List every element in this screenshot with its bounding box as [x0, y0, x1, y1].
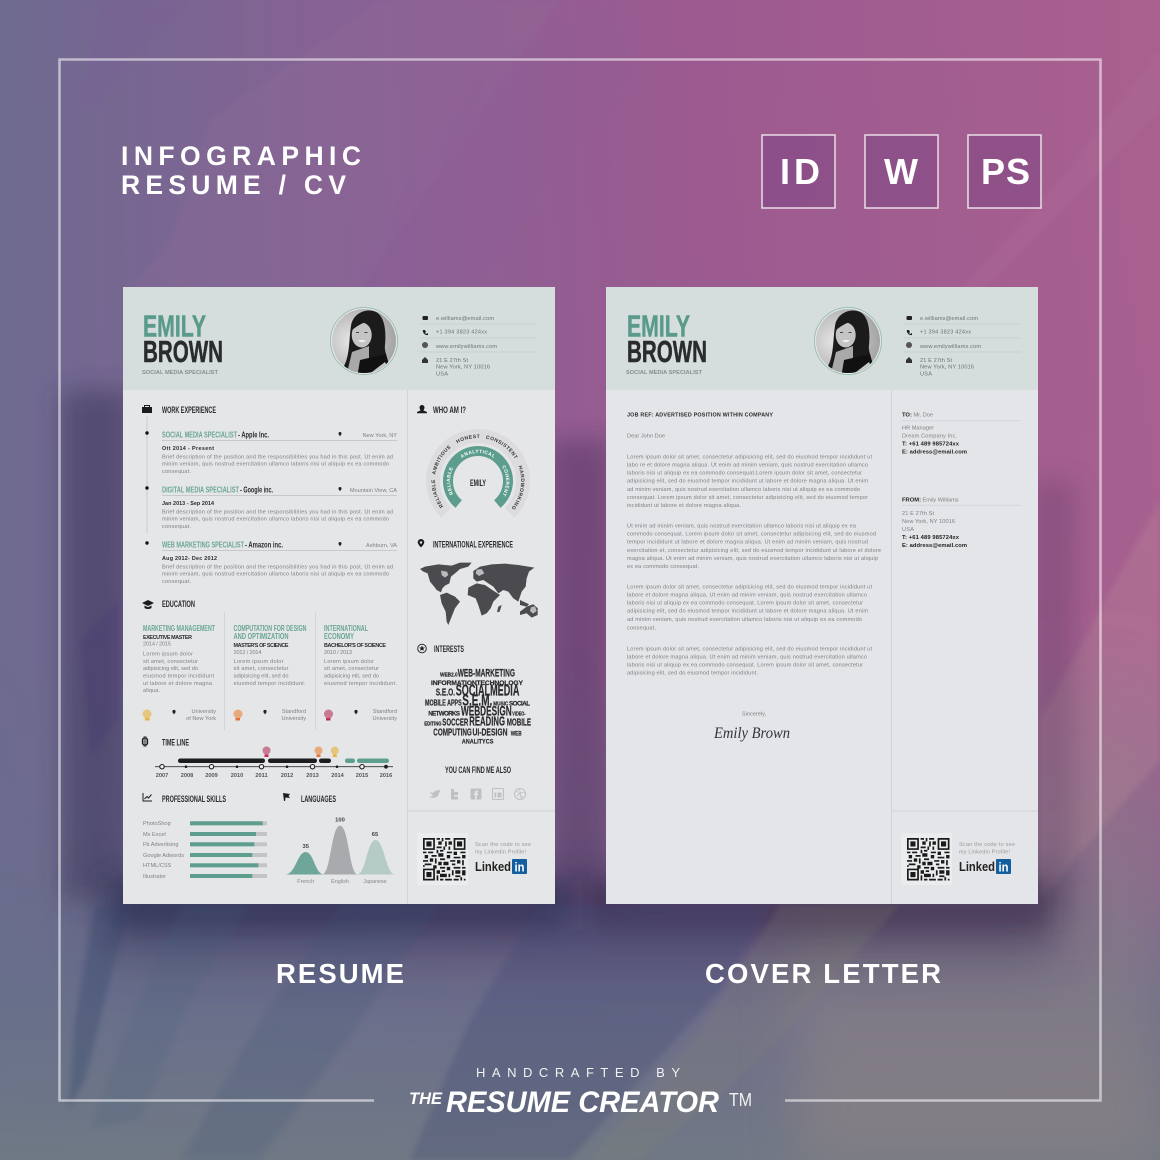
- paragraph 3: [627, 585, 872, 631]
- linkedin logo: Linked: [959, 859, 995, 874]
- chart: language peaks: Japanese: [363, 879, 387, 885]
- paragraph 2: tempor incididunt ut labore et dolore magna aliqua. Ut enim ad minim veniam, quis nostrud: [627, 540, 868, 546]
- chart: personality arcs: EMILY: [470, 478, 486, 488]
- paragraph 3: Lorem ipsum dolor sit amet, consectetur adipisicing elit, sed do eiusmod tempor incididunt ut: [627, 585, 872, 591]
- education column 3: ECONOMY: [324, 631, 354, 641]
- education column 1: adipisicing elit, sed do: [143, 666, 198, 672]
- badge: PS: PS: [981, 151, 1030, 192]
- recipient block: [902, 413, 1021, 456]
- icon: person: [417, 405, 427, 413]
- section: professional skills: PROFESSIONAL SKILLS: [162, 794, 226, 804]
- education column 3: adipisicing elit, sed do: [324, 674, 379, 680]
- education column 3: [324, 623, 397, 722]
- paragraph 4: adipisicing elit, sed do eiusmod tempor incididunt.: [627, 670, 758, 676]
- chart: word cloud: INFORMATIONTECHNOLOGY: [431, 680, 523, 687]
- chart: personality arcs: CONSISTENT: [486, 436, 518, 458]
- education column 2: adipisicing elit, sed do: [234, 674, 288, 680]
- qr code and linkedin: my Linkedin Profile!: [475, 850, 526, 856]
- section: who am i: [417, 405, 530, 518]
- qr code and linkedin: Scan the code to see: [959, 842, 1015, 848]
- education column 2: 2012 / 2014: [234, 650, 262, 656]
- section: professional skills: Fb Advertising: [143, 842, 178, 848]
- recipient block: HR Manager: [902, 426, 934, 432]
- education column 3: 2010 / 2013: [324, 650, 352, 656]
- paragraph 4: labore et dolore magna aliqua. Ut enim ad minim veniam, quis nostrud exercitation ullamco: [627, 654, 867, 660]
- job 2: Brief description of the position and the responsibilities you had in this post. Ut enim ad: [162, 510, 393, 516]
- chart: language peaks: 65: [372, 832, 379, 838]
- sender block: E: address@email.com: [902, 543, 967, 549]
- paragraph 4: laboris nisi ut aliquip ex ea commodo consequat. Lorem ipsum dolor sit amet, consectetur: [627, 662, 863, 668]
- job 3: Aug 2012- Dec 2012: [162, 556, 217, 562]
- cover name: SOCIAL MEDIA SPECIALIST: [626, 370, 703, 376]
- job 1: [162, 430, 397, 475]
- label: resume: RESUME: [276, 958, 404, 989]
- chart: word cloud: S.E.O.: [436, 687, 455, 698]
- chart: world map: [420, 563, 538, 625]
- chart: personality arcs: ANALYTICAL: [461, 450, 494, 458]
- title: RESUME / CV: [121, 170, 346, 200]
- section: time line: 2007: [156, 773, 168, 779]
- job 3: [162, 540, 397, 585]
- chart: personality arcs: [426, 429, 530, 518]
- education column 2: University: [281, 716, 306, 722]
- qr code: [907, 838, 950, 880]
- section: time line: 2015: [356, 773, 368, 779]
- badge: W: [865, 135, 938, 208]
- chart: word cloud: MUSIC: [493, 702, 509, 708]
- cover name: BROWN: [627, 334, 707, 369]
- letter body: JOB REF: ADVERTISED POSITION WITHIN COMPANY: [627, 413, 773, 419]
- section: interests: [418, 644, 531, 745]
- education column 2: COMPUTATION FOR DESIGN: [234, 623, 306, 633]
- paragraph 3: ad minim veniam, quis nostrud exercitation ullamco laboris nisi ut aliquip ex ea commodo: [627, 617, 862, 623]
- paragraph 1: [627, 455, 872, 509]
- sender block: New York, NY 10016: [902, 519, 955, 525]
- chart: personality arcs: RELIABLE: [432, 480, 444, 508]
- chart: word cloud: ANALITYCS: [462, 738, 494, 745]
- section: time line: 2008: [181, 773, 193, 779]
- paragraph 4: Lorem ipsum dolor sit amet, consectetur adipisicing elit, sed do eiusmod tempor incididunt ut: [627, 646, 872, 652]
- contact list: www.emilywilliams.com: [435, 344, 497, 350]
- job 3: minim veniam, quis nostrud exercitation ullamco laboris nisi ut aliquip ex ea commodo: [162, 572, 389, 578]
- section: time line: 2011: [255, 773, 268, 779]
- section: work experience: WORK EXPERIENCE: [162, 405, 216, 415]
- credit: handcrafted by: THE: [409, 1090, 443, 1108]
- contact list: USA: [920, 372, 932, 378]
- contact list: [904, 316, 1021, 378]
- job 1: Ott 2014 - Present: [162, 446, 214, 452]
- section: education: [142, 599, 397, 730]
- chart: personality arcs: RELIABLE: [446, 467, 454, 496]
- social links: YOU CAN FIND ME ALSO: [445, 765, 511, 775]
- section: time line: 2013: [306, 773, 319, 779]
- education column 3: Lorem ipsum dolor: [324, 659, 374, 665]
- qr code and linkedin: my Linkedin Profile!: [959, 850, 1010, 856]
- chart: word cloud: VIDEO-: [512, 711, 526, 717]
- sender block: USA: [902, 527, 914, 533]
- paragraph 2: ex ea commodo consequat.: [627, 564, 699, 570]
- education column 1: Lorem ipsum dolor: [143, 652, 193, 658]
- chart: personality arcs: HARDWORKING: [512, 466, 524, 510]
- linkedin logo: in: [998, 860, 1009, 874]
- education column 3: BACHELOR'S OF SCIENCE: [324, 643, 386, 649]
- section: time line: [142, 736, 393, 779]
- paragraph 3: labore et dolore magna aliqua. Ut enim ad minim veniam, quis nostrud exercitation ullamco: [627, 593, 867, 599]
- education column 2: sit amet, consectetur: [234, 666, 289, 672]
- cover name: EMILY: [627, 308, 690, 344]
- chart: personality arcs: HONEST: [456, 434, 480, 444]
- contact list: e.williams@email.com: [920, 316, 978, 322]
- chart: word cloud: WEB2.0: [440, 673, 458, 679]
- job 2: Mountain View, CA: [350, 488, 397, 494]
- sender block: FROM: Emily Williams: [902, 497, 959, 503]
- qr code and linkedin: [901, 833, 1015, 885]
- section: time line: 2010: [231, 773, 243, 779]
- icon: line chart: [143, 793, 152, 801]
- chart: language peaks: 100: [335, 818, 345, 824]
- job 3: WEB MARKETING SPECIALIST: [162, 540, 245, 550]
- chart: word cloud: SOCIALMEDIA: [456, 682, 519, 699]
- recipient block: T: +61 489 985724xx: [902, 442, 960, 448]
- section: time line: TIME LINE: [162, 738, 189, 748]
- education column 3: University: [372, 716, 397, 722]
- education column 3: Standford: [373, 709, 397, 715]
- job 3: consequat.: [162, 579, 191, 585]
- job 1: SOCIAL MEDIA SPECIALIST: [162, 430, 238, 440]
- job 1: minim veniam, quis nostrud exercitation ullamco laboris nisi ut aliquip ex ea commodo: [162, 462, 389, 468]
- education column 1: University: [191, 709, 216, 715]
- paragraph 2: magna aliqua. Ut enim ad minim veniam, quis nostrud exercitation ullamco laboris nisi ut aliquip: [627, 556, 878, 562]
- sender block: 21 E 27th St: [902, 511, 934, 517]
- job 2: - Google inc.: [240, 484, 273, 494]
- paragraph 3: consequat.: [627, 625, 656, 631]
- chart: word cloud: SOCCER: [442, 718, 469, 729]
- recipient block: E: address@email.com: [902, 450, 967, 456]
- icon: star badge: [418, 644, 426, 653]
- job 2: [162, 484, 397, 530]
- qr code and linkedin: Scan the code to see: [475, 842, 531, 848]
- icon: graduation cap: [142, 600, 154, 609]
- letter body: [627, 413, 881, 742]
- sender block: T: +61 489 985724xx: [902, 535, 960, 541]
- credit: handcrafted by: TM: [729, 1090, 752, 1110]
- job 3: Brief description of the position and the responsibilities you had in this post. Ut enim ad: [162, 564, 393, 570]
- section: time line: 2012: [281, 773, 293, 779]
- contact list: e.williams@email.com: [436, 316, 494, 322]
- paragraph 3: adipisicing elit, sed do eiusmod tempor incididunt ut labore et dolore magna aliqua. Ut enim: [627, 609, 868, 615]
- paragraph 2: commodo consequat. Lorem ipsum dolor sit amet, consectetur adipisicing elit, sed do eiusmod: [627, 532, 876, 538]
- section: time line: 2014: [331, 773, 345, 779]
- section: education: EDUCATION: [162, 599, 195, 609]
- label: cover letter: COVER LETTER: [705, 958, 941, 989]
- paragraph 3: laboris nisi ut aliquip ex ea commodo consequat. Lorem ipsum dolor sit amet, consectetur: [627, 600, 863, 606]
- section: professional skills: Ms Excel: [143, 832, 166, 838]
- education column 1: eiusmod tempor incididunt: [143, 674, 214, 680]
- chart: word cloud: S.E.M.: [462, 693, 492, 710]
- chart: word cloud: SOCIAL: [509, 701, 530, 708]
- chart: language peaks: [285, 818, 395, 885]
- chart: personality arcs: AMBITIOUS: [432, 446, 450, 475]
- job 1: consequat.: [162, 469, 191, 475]
- education column 2: Lorem ipsum dolor: [234, 659, 284, 665]
- contact list: 21 E 27th St: [436, 358, 468, 364]
- chart: word cloud: WEB-MARKETING: [458, 668, 515, 680]
- chart: word cloud: WEB: [511, 731, 522, 738]
- chart: word cloud: NETWORKS: [428, 710, 460, 717]
- linkedin logo: Linked: [475, 859, 511, 874]
- chart: word cloud: [424, 668, 531, 745]
- contact list: +1 394 3823 424xx: [436, 330, 487, 336]
- badge: ID: ID: [780, 151, 820, 192]
- contact list: [420, 316, 537, 378]
- education column 1: EXECUTIVE MASTER: [143, 635, 192, 641]
- resume name: SOCIAL MEDIA SPECIALIST: [142, 370, 219, 376]
- panel: resume page: [123, 287, 555, 904]
- title: INFOGRAPHIC: [121, 141, 361, 171]
- portrait: [330, 308, 398, 378]
- education column 2: MASTER'S OF SCIENCE: [234, 643, 289, 649]
- paragraph 1: incididunt ut labore et dolore magna aliqua.: [627, 503, 741, 509]
- contact list: New York, NY 10016: [920, 364, 974, 370]
- job 2: minim veniam, quis nostrud exercitation ullamco laboris nisi ut aliquip ex ea commodo: [162, 516, 389, 522]
- paragraph 1: ad minim veniam, quis nostrud exercitation ullamco laboris nisi ut aliquip ex ea commodo: [627, 487, 860, 493]
- education column 3: eiusmod tempor incididunt.: [324, 681, 397, 687]
- recipient block: Dream Company Inc.: [902, 434, 957, 440]
- chart: language peaks: French: [297, 879, 314, 885]
- icon: flag: [283, 793, 290, 801]
- chart: language peaks: 35: [302, 844, 310, 850]
- education column 1: ut labore et dolore magna: [143, 681, 213, 687]
- education column 2: [234, 623, 306, 722]
- icon: briefcase: [142, 405, 152, 413]
- section: professional skills: Google Adwords: [143, 853, 184, 859]
- chart: word cloud: EDITING: [424, 722, 442, 728]
- section: professional skills: Illustrator: [143, 874, 166, 880]
- chart: personality arcs: COHERENT: [502, 466, 510, 496]
- chart: language peaks: English: [331, 879, 349, 885]
- portrait: [814, 308, 882, 378]
- letter body: Dear John Doe: [627, 433, 665, 439]
- section: languages: [283, 793, 395, 885]
- section: work experience: [142, 405, 397, 585]
- education column 1: aliqua.: [143, 688, 160, 694]
- education column 2: AND OPTIMIZATION: [234, 631, 288, 641]
- chart: word cloud: MOBILE: [507, 718, 531, 729]
- icon: map pin: [418, 539, 424, 548]
- paragraph 4: [627, 646, 872, 676]
- chart: word cloud: COMPUTING: [433, 728, 472, 739]
- section: international experience: INTERNATIONAL EXPERIENCE: [433, 540, 513, 550]
- paragraph 1: laboris nisi ut aliquip ex ea commodo consequat.Lorem ipsum dolor sit amet, consectetur: [627, 470, 862, 476]
- section: professional skills: [143, 793, 267, 880]
- resume name: BROWN: [143, 334, 223, 369]
- chart: word cloud: READING: [469, 714, 505, 729]
- credit: handcrafted by: [409, 1065, 752, 1119]
- paragraph 1: adipisicing elit, sed do eiusmod tempor incididunt ut labore et dolore magna aliqua. Ut enim: [627, 478, 868, 484]
- paragraph 1: Lorem ipsum dolor sit amet, consectetur adipisicing elit, sed do eiusmod tempor incididunt ut: [627, 455, 872, 461]
- cover name: [626, 308, 707, 376]
- section: interests: INTERESTS: [434, 644, 464, 654]
- chart: word cloud: UI-DESIGN: [472, 728, 508, 739]
- job 2: DIGITAL MEDIA SPECIALIST: [162, 484, 240, 494]
- education column 1: of New York: [186, 716, 216, 722]
- social links: [429, 765, 526, 800]
- job 2: consequat.: [162, 524, 191, 530]
- education column 1: 2014 / 2015: [143, 642, 171, 648]
- section: time line: 2009: [205, 773, 218, 779]
- sender block: [902, 497, 1021, 549]
- icon: watch: [142, 736, 148, 747]
- section: who am i: WHO AM I?: [433, 405, 466, 415]
- credit: handcrafted by: HANDCRAFTED BY: [476, 1065, 680, 1080]
- job 1: Brief description of the position and the responsibilities you had in this post. Ut enim ad: [162, 454, 393, 460]
- education column 3: sit amet, consectetur: [324, 666, 379, 672]
- qr code and linkedin: [417, 833, 531, 885]
- paragraph 2: [627, 524, 881, 570]
- education column 3: INTERNATIONAL: [324, 623, 368, 633]
- badge: PS: [968, 135, 1041, 208]
- contact list: 21 E 27th St: [920, 358, 952, 364]
- job 1: New York, NY: [362, 433, 397, 439]
- badge: ID: [762, 135, 835, 208]
- paragraph 2: exercitation et, consectetur adipisicing elit, sed do eiusmod tempor incididunt ut labore et dolore: [627, 548, 881, 554]
- education column 2: eiusmod tempor incididunt.: [234, 681, 306, 687]
- section: professional skills: PhotoShop: [143, 821, 171, 827]
- title: [121, 141, 361, 200]
- job 2: Jan 2013 - Sep 2014: [162, 501, 214, 507]
- signature: Emily Brown: [713, 725, 790, 742]
- resume name: [142, 308, 223, 376]
- contact list: USA: [436, 372, 448, 378]
- letter body: Sincerely,: [742, 712, 767, 718]
- contact list: www.emilywilliams.com: [919, 344, 981, 350]
- recipient block: TO: Mr. Doe: [902, 413, 933, 419]
- paragraph 1: consequat. Lorem ipsum dolor sit amet, consectetur adipisicing elit, sed do eiusmod tempor: [627, 495, 868, 501]
- section: international experience: [418, 539, 538, 625]
- chart: word cloud: MOBILE APPS: [425, 699, 462, 708]
- job 3: Ashburn, VA: [366, 543, 397, 549]
- resume name: EMILY: [143, 308, 206, 344]
- education column 1: MARKETING MANAGEMENT: [143, 623, 215, 633]
- qr code: [423, 838, 466, 880]
- education column 2: Standford: [282, 709, 306, 715]
- contact list: +1 394 3823 424xx: [920, 330, 971, 336]
- panel: cover letter page: [606, 287, 1038, 904]
- section: professional skills: HTML/CSS: [143, 863, 172, 869]
- education column 1: [142, 623, 216, 722]
- job 1: - Apple Inc.: [238, 430, 269, 440]
- education column 1: sit amet, consectetur: [143, 659, 198, 665]
- paragraph 2: Ut enim ad minim veniam, quis nostrud exercitation ullamco laboris nisi ut aliquip ex ea: [627, 524, 857, 530]
- linkedin logo: in: [514, 860, 525, 874]
- badge: W: W: [884, 151, 918, 192]
- section: time line: 2016: [380, 773, 392, 779]
- paragraph 1: labo re et dolore magna aliqua. Ut enim ad minim veniam, quis nostrud exercitation ullamco: [627, 462, 868, 468]
- credit: handcrafted by: RESUME CREATOR: [446, 1086, 719, 1119]
- section: languages: LANGUAGES: [301, 794, 336, 804]
- contact list: New York, NY 10016: [436, 364, 490, 370]
- job 3: - Amazon inc.: [245, 540, 283, 550]
- chart: word cloud: WEBDESIGN: [461, 702, 512, 718]
